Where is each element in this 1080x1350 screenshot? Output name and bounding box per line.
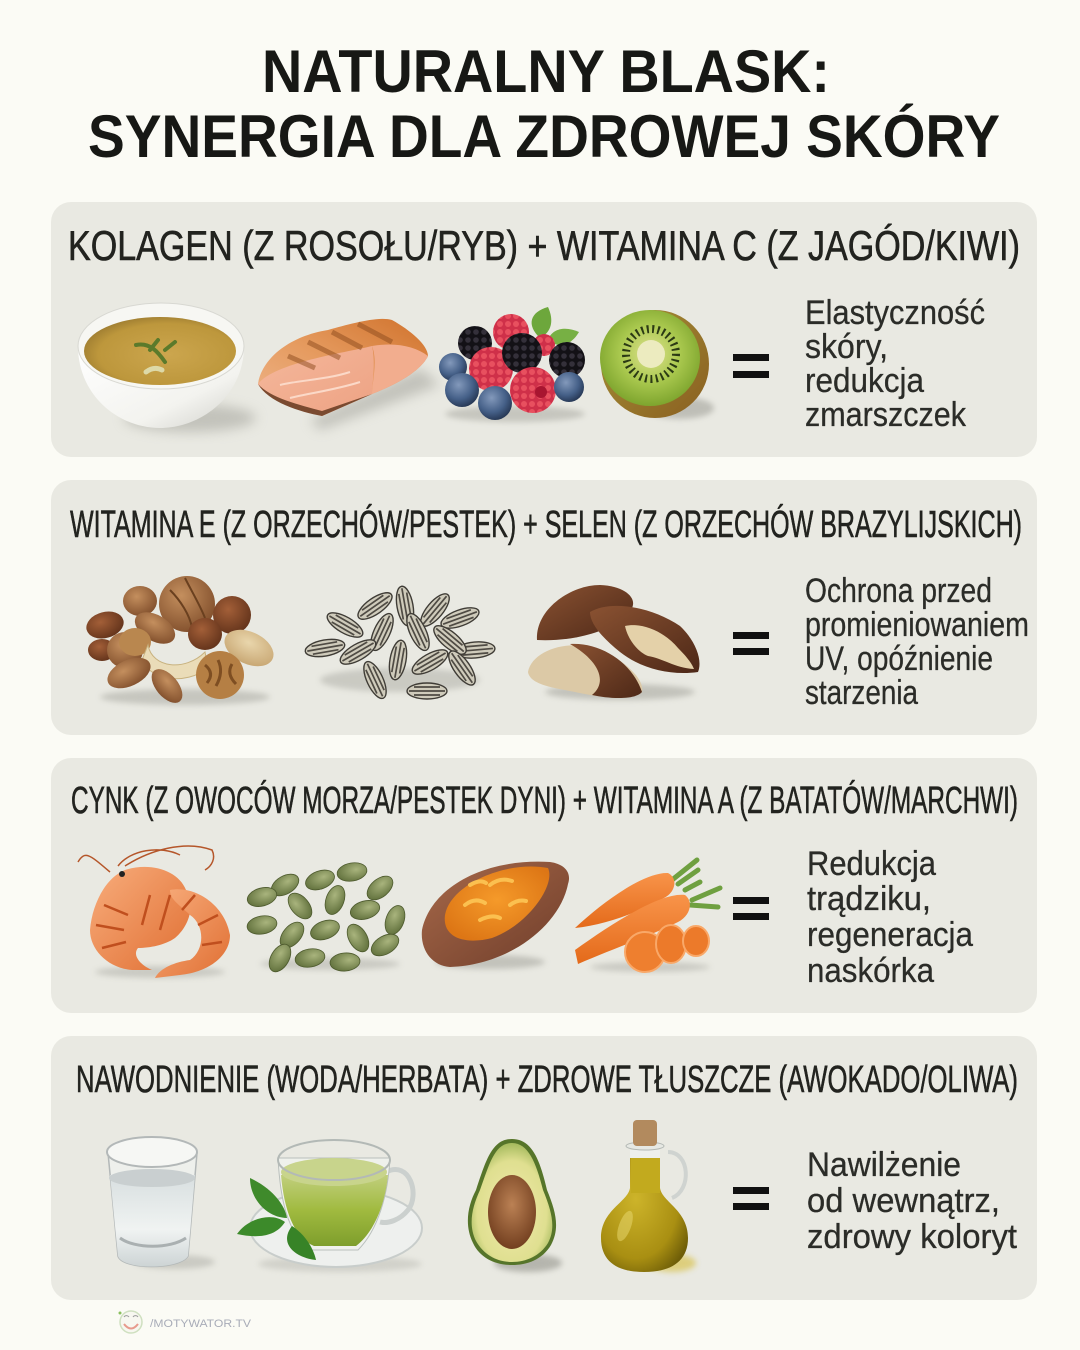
icon: bowl of broth <box>78 303 256 432</box>
title <box>88 38 1000 170</box>
icon: kiwi <box>600 310 714 419</box>
title: SYNERGIA DLA ZDROWEJ SKÓRY <box>88 103 1000 170</box>
panel: nawodnienie i zdrowe tłuszcze <box>51 1036 1037 1300</box>
result text: naskórka <box>807 952 934 990</box>
result text: zmarszczek <box>805 396 967 434</box>
equals sign <box>733 632 769 655</box>
icon: mixed nuts <box>83 576 279 708</box>
result text <box>807 845 973 990</box>
result text: Ochrona przed <box>805 572 992 610</box>
watermark <box>118 1311 252 1333</box>
title: NATURALNY BLASK: <box>262 38 830 105</box>
icon: shrimp <box>78 846 230 978</box>
result text: UV, opóźnienie <box>805 640 993 678</box>
icon: baked sweet potato <box>422 862 569 969</box>
icon: brazil nuts <box>528 585 699 700</box>
result text <box>807 1146 1018 1256</box>
result text: starzenia <box>805 674 918 712</box>
result text: Elastyczność <box>805 294 985 332</box>
icon: green tea cup <box>237 1140 422 1272</box>
result text: regeneracja <box>807 916 973 954</box>
equals sign <box>733 354 769 378</box>
icon: avocado <box>468 1139 562 1272</box>
panel: witamina E i selen <box>51 480 1037 735</box>
icon: olive oil bottle <box>601 1120 696 1272</box>
watermark text: /MOTYWATOR.TV <box>150 1318 252 1330</box>
result text <box>805 294 985 434</box>
result text: redukcja <box>805 362 924 400</box>
equals sign <box>733 1187 769 1210</box>
result text: od wewnątrz, <box>807 1182 1000 1220</box>
result text: trądziku, <box>807 880 931 918</box>
panel: cynk i witamina A <box>51 758 1037 1013</box>
icon: pumpkin seeds <box>245 861 409 975</box>
icon: berries <box>439 307 585 422</box>
result text: Redukcja <box>807 845 936 883</box>
icon: watermark logo <box>118 1311 142 1333</box>
equals sign <box>733 897 769 920</box>
panel: kolagen i witamina C <box>51 202 1037 457</box>
result text: skóry, <box>805 328 888 366</box>
icon: salmon fillet <box>258 319 440 430</box>
result text: Nawilżenie <box>807 1146 961 1184</box>
result text: promieniowaniem <box>805 606 1029 644</box>
result text: zdrowy koloryt <box>807 1218 1018 1256</box>
icon: glass of water <box>107 1137 215 1269</box>
result text <box>805 572 1029 712</box>
icon: carrots <box>575 860 720 972</box>
icon: sunflower seeds <box>304 585 496 702</box>
